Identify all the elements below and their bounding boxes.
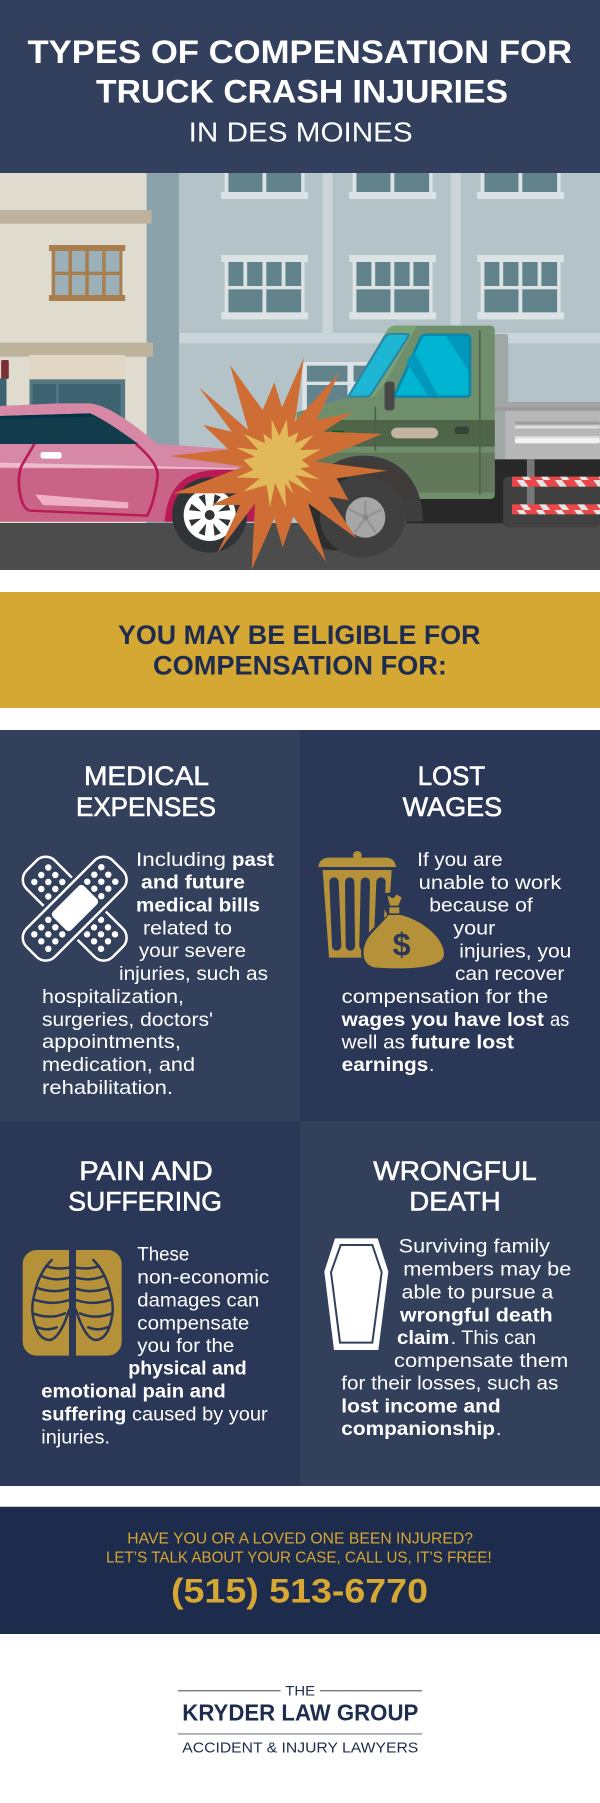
text: pain and suffering: injuries.	[41, 1426, 110, 1448]
heading: wrongful death: DEATH	[409, 1187, 501, 1217]
header panel	[0, 0, 600, 173]
text: wrongful death: . This can	[451, 1327, 536, 1349]
heading: pain and suffering: PAIN AND	[79, 1156, 213, 1186]
icon: rib cage x-ray	[23, 1248, 122, 1357]
banner heading: YOU MAY BE ELIGIBLE FOR	[118, 620, 480, 650]
text: medical expenses: and future	[141, 872, 245, 894]
phone number: (515) 513-6770	[171, 1573, 428, 1611]
panel: lost wages	[300, 730, 600, 1121]
text: medical expenses: past	[232, 849, 275, 871]
text: wrongful death: members may be	[403, 1259, 571, 1281]
text: medical expenses: appointments,	[42, 1031, 181, 1053]
logo: the kryder law group: KRYDER LAW GROUP	[182, 1700, 418, 1726]
text: medical expenses: your severe	[139, 940, 246, 962]
text: wrongful death: able to pursue a	[402, 1282, 553, 1304]
banner heading	[118, 620, 480, 681]
text: lost wages: well as	[341, 1031, 405, 1053]
text: medical expenses: medication, and	[42, 1054, 195, 1076]
text: pain and suffering: compensate	[137, 1312, 249, 1334]
text: lost wages: because of	[429, 895, 533, 917]
truck cab	[297, 326, 495, 522]
text: pain and suffering: suffering	[41, 1403, 126, 1425]
text: lost wages: wages you have lost	[341, 1009, 545, 1031]
heading: wrongful death: WRONGFUL	[373, 1156, 537, 1186]
illustration: truck crash street scene	[0, 160, 600, 576]
text: lost wages: .	[429, 1054, 434, 1076]
icon: trash can and money bag: $	[393, 925, 411, 962]
call to action text: HAVE YOU OR A LOVED ONE BEEN INJURED?	[127, 1530, 473, 1547]
text: lost wages: as	[550, 1009, 570, 1031]
text: lost wages: future lost	[411, 1031, 515, 1053]
panel: pain and suffering	[0, 1121, 300, 1486]
beige building	[0, 160, 179, 527]
text: pain and suffering: damages can	[137, 1290, 259, 1312]
text: pain and suffering: caused by your	[132, 1403, 268, 1425]
subtitle: IN DES MOINES	[189, 117, 413, 148]
truck bed	[406, 334, 600, 527]
text: wrongful death: companionship	[341, 1418, 495, 1440]
truck wheels	[299, 476, 406, 557]
text: medical expenses: hospitalization,	[42, 986, 184, 1008]
heading: lost wages: WAGES	[403, 792, 502, 822]
text: wrongful death: wrongful death	[399, 1304, 553, 1326]
text: pain and suffering: non-economic	[137, 1267, 270, 1289]
call to action band	[0, 1506, 600, 1634]
logo: the kryder law group: ACCIDENT & INJURY LAWYERS	[182, 1740, 418, 1757]
heading: medical expenses: EXPENSES	[76, 792, 216, 822]
text: pain and suffering: you for the	[137, 1335, 234, 1357]
car wheel	[172, 477, 247, 553]
text: lost wages: If you are	[417, 849, 503, 871]
text: medical expenses: rehabilitation.	[42, 1077, 173, 1099]
title: TYPES OF COMPENSATION FOR	[28, 34, 572, 70]
grey building	[179, 160, 600, 527]
logo: the kryder law group	[178, 1683, 422, 1757]
panel: wrongful death	[300, 1121, 600, 1486]
text: lost wages: compensation for the	[342, 986, 548, 1008]
text: lost wages: your	[453, 918, 496, 940]
gold banner	[0, 592, 600, 708]
heading: medical expenses	[76, 761, 216, 822]
text: medical expenses: Including	[136, 849, 226, 871]
text: wrongful death: .	[496, 1418, 501, 1440]
panel: medical expenses	[0, 730, 300, 1121]
text: pain and suffering	[41, 1244, 270, 1448]
text: lost wages: unable to work	[419, 872, 562, 894]
call to action text	[106, 1530, 492, 1566]
text: medical expenses: injuries, such as	[119, 963, 268, 985]
icon: crossed bandages	[17, 851, 132, 966]
text: lost wages: injuries, you	[459, 940, 571, 962]
text: wrongful death: Surviving family	[399, 1236, 550, 1258]
text: wrongful death	[341, 1236, 571, 1440]
text: lost wages: can recover	[455, 963, 565, 985]
text: medical expenses: medical bills	[136, 895, 260, 917]
text: lost wages: earnings	[342, 1054, 428, 1076]
icon: coffin	[324, 1238, 388, 1350]
heading: lost wages	[403, 761, 502, 822]
text: wrongful death: lost income and	[341, 1395, 501, 1417]
heading: pain and suffering: SUFFERING	[68, 1187, 222, 1217]
text: medical expenses: surgeries, doctors'	[42, 1009, 213, 1031]
heading: lost wages: LOST	[418, 761, 485, 791]
heading: medical expenses: MEDICAL	[84, 761, 209, 791]
text: pain and suffering: emotional pain and	[41, 1380, 226, 1402]
heading: pain and suffering	[68, 1156, 222, 1217]
road	[0, 523, 600, 570]
explosion burst	[169, 357, 387, 569]
logo: the kryder law group: THE	[285, 1683, 315, 1699]
text: wrongful death: claim	[397, 1327, 449, 1349]
heading: wrongful death	[373, 1156, 537, 1217]
title: TRUCK CRASH INJURIES	[96, 74, 508, 110]
title	[28, 34, 572, 110]
text: pain and suffering: These	[137, 1244, 189, 1266]
explosion core	[236, 419, 321, 507]
text: wrongful death: for their losses, such as	[341, 1373, 559, 1395]
banner heading: COMPENSATION FOR:	[153, 651, 447, 681]
text: wrongful death: compensate them	[394, 1350, 568, 1372]
call to action text: LET’S TALK ABOUT YOUR CASE, CALL US, IT’S FREE!	[106, 1549, 492, 1566]
text: pain and suffering: physical and	[128, 1358, 247, 1380]
icon: trash can and money bag	[318, 851, 446, 971]
text: medical expenses: related to	[143, 918, 232, 940]
pink car	[0, 403, 260, 522]
text: lost wages	[341, 849, 571, 1076]
text: medical expenses	[42, 849, 275, 1099]
